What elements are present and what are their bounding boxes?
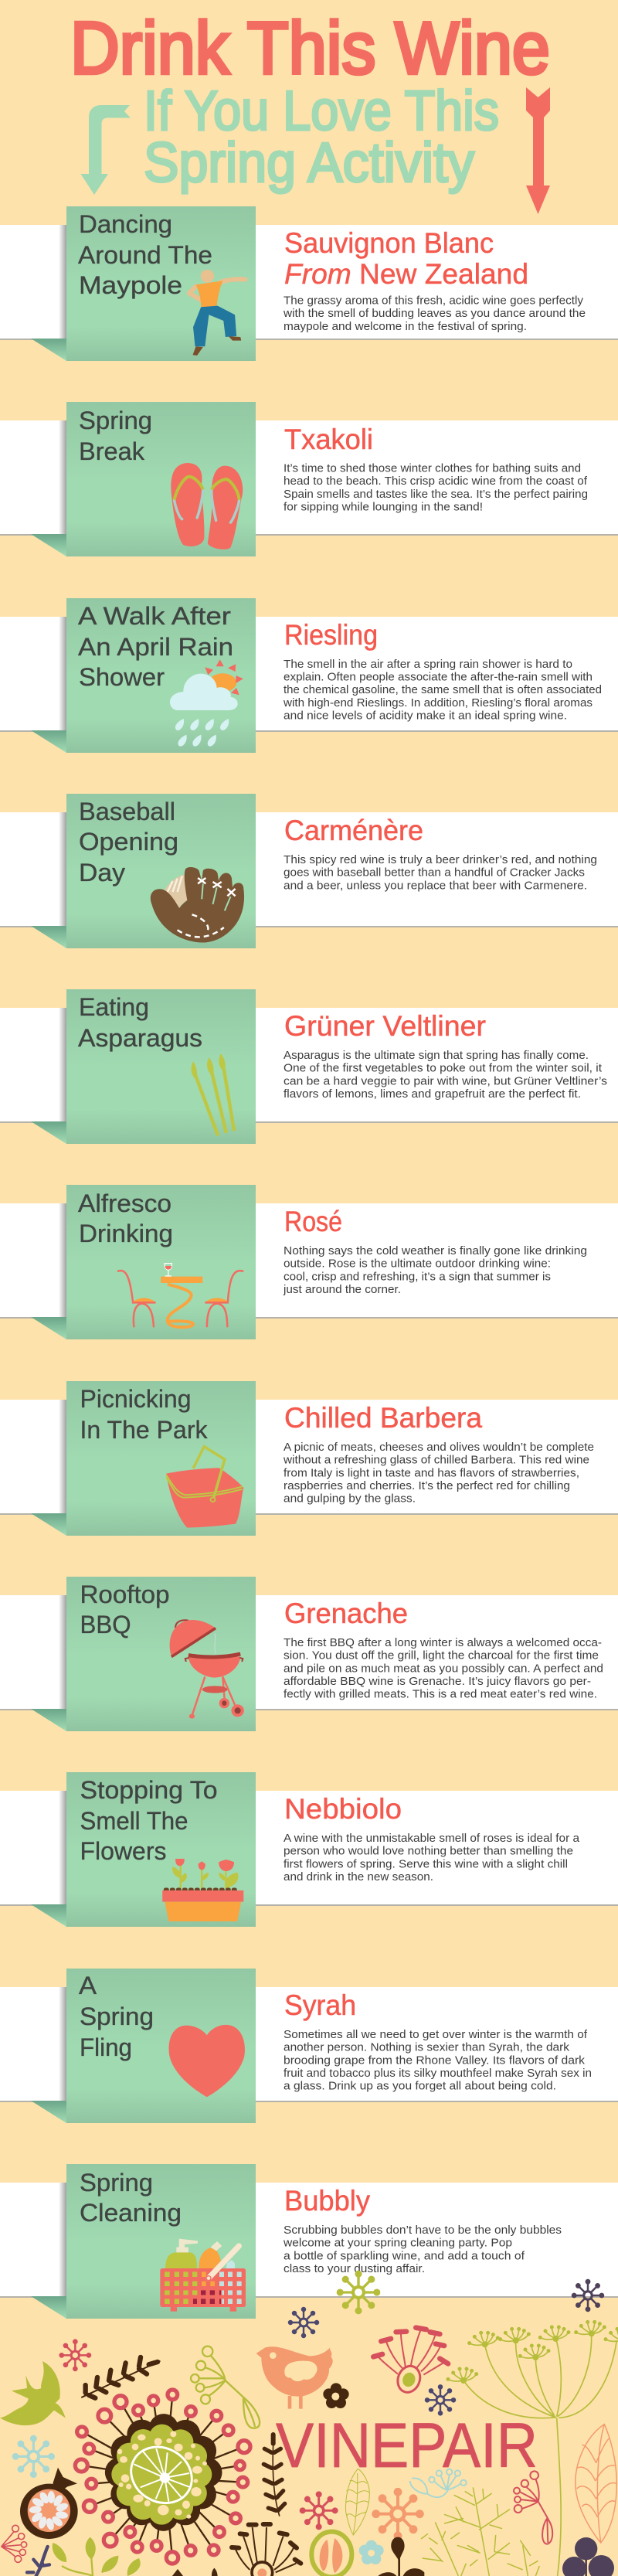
- activity title: Baseball: [79, 798, 175, 825]
- activity title: Eating: [79, 993, 149, 1021]
- description: fectly with grilled meats. This is a red meat eater’s red wine.: [284, 1688, 597, 1700]
- activity title: [80, 1581, 170, 1638]
- description: The first BBQ after a long winter is always a welcomed occa-: [284, 1636, 602, 1649]
- icon: dill umbels: [448, 2322, 618, 2576]
- activity title: Flowers: [80, 1837, 167, 1865]
- icon: heart: [169, 2025, 245, 2097]
- row: Dancing Around The Maypole: [0, 206, 618, 361]
- white band: [0, 420, 618, 536]
- activity title: Cleaning: [80, 2199, 182, 2227]
- description: [284, 853, 597, 892]
- white band: [0, 1203, 618, 1319]
- activity title: Around The: [78, 241, 212, 269]
- activity title: [79, 1972, 154, 2061]
- activity title: [80, 1385, 209, 1444]
- description: This spicy red wine is truly a beer drinker’s red, and nothing: [284, 853, 597, 866]
- activity title: Spring: [80, 2169, 153, 2197]
- wine name: Riesling: [284, 619, 378, 651]
- wine name: Sauvignon Blanc: [284, 227, 494, 259]
- logo: VINEPAIR: [276, 2411, 538, 2481]
- wine name: Syrah: [284, 1989, 356, 2021]
- description: [284, 1636, 603, 1700]
- description: A picnic of meats, cheeses and olives wouldn’t be complete: [284, 1441, 594, 1454]
- folded corner: [31, 534, 66, 556]
- description: One of the first vegetables to poke out from the winter soil, it: [284, 1062, 603, 1074]
- activity title: Opening: [79, 828, 178, 856]
- icon: dark branch: [82, 2357, 160, 2398]
- description: [284, 462, 588, 513]
- icon: red fan flower: [373, 2328, 448, 2395]
- icon: olive branches: [421, 2487, 539, 2576]
- icon: baseball glove: [151, 867, 244, 943]
- icon: brown spade plant: [378, 2537, 424, 2576]
- activity title: Fling: [80, 2033, 132, 2061]
- activity title: Day: [79, 859, 125, 886]
- wine name: Txakoli: [284, 424, 373, 455]
- icon: bottom seeds: [172, 2568, 218, 2576]
- description: [284, 1049, 607, 1101]
- description: [283, 294, 586, 333]
- activity title: Smell The: [80, 1807, 188, 1835]
- title: Drink This Wine: [70, 7, 550, 90]
- description: [283, 1441, 594, 1506]
- description: a glass. Drink up as you forget all about being cold.: [284, 2079, 556, 2093]
- icon: navy spark: [427, 2387, 453, 2413]
- description: and gulping by the glass.: [284, 1492, 416, 1506]
- icon: brown sprig: [263, 2435, 285, 2516]
- activity title: Rooftop: [80, 1581, 170, 1608]
- description: another person. Nothing is sexier than Syrah, the dark: [284, 2040, 570, 2054]
- icon: olive leaves: [53, 2537, 141, 2576]
- wine name: Nebbiolo: [284, 1793, 402, 1825]
- green card: [66, 1772, 256, 1927]
- icon: red spark: [303, 2494, 335, 2527]
- icon: cafe table and chairs: [117, 1264, 243, 1327]
- description: for sipping while lounging in the sand!: [284, 501, 483, 513]
- row: Baseball Opening Day: [0, 794, 618, 948]
- description: sion. You dust off the grill, light the charcoal for the first time: [284, 1649, 599, 1662]
- activity title: [78, 1189, 173, 1247]
- white band: [0, 617, 618, 732]
- description: Scrubbing bubbles don’t have to be the only bubbles: [284, 2224, 562, 2237]
- activity title: Stopping To: [80, 1776, 218, 1804]
- icon: olive swallow: [0, 2361, 66, 2425]
- description: Sometimes all we need to get over winter is the warmth of: [284, 2028, 588, 2041]
- green card: [66, 1577, 256, 1731]
- description: head to the beach. This crisp acidic wine from the coast of: [284, 475, 588, 488]
- icon: blue spark: [15, 2438, 52, 2475]
- icon: picnic basket: [166, 1447, 243, 1528]
- activity title: Spring: [80, 2003, 154, 2030]
- icon: orange bird: [256, 2346, 333, 2409]
- folded corner: [31, 2101, 66, 2123]
- folded corner: [31, 730, 66, 753]
- icon: brown flower: [323, 2383, 349, 2408]
- green card: [66, 989, 256, 1144]
- icon: olive leaf outline: [346, 2469, 369, 2535]
- description: [283, 658, 602, 722]
- description: raspberries and cherries. It’s the perfect red for chilling: [284, 1479, 570, 1492]
- icon: sun, cloud and rain: [170, 659, 243, 747]
- description: just around the corner.: [283, 1283, 401, 1296]
- description: Nothing says the cold weather is finally gone like drinking: [284, 1244, 587, 1257]
- description: It’s time to shed those winter clothes for bathing suits and: [284, 462, 581, 475]
- wine name: Grüner Veltliner: [284, 1010, 486, 1042]
- description: [283, 2224, 562, 2275]
- description: a bottle of sparkling wine, and add a touch of: [284, 2249, 525, 2263]
- folded corner: [31, 339, 66, 361]
- description: affordable BBQ wine is Grenache. It’s juicy flavors go per-: [284, 1675, 591, 1688]
- activity title: [78, 993, 202, 1052]
- footer right floral group: [303, 2322, 618, 2576]
- description: person who would love nothing better than smelling the: [284, 1844, 573, 1858]
- folded corner: [31, 926, 66, 948]
- footer left floral group: [0, 2342, 333, 2576]
- green card: [66, 1381, 256, 1536]
- white band: [0, 1008, 618, 1123]
- description: and pile on as much meat as you possibly can. A perfect and: [284, 1662, 603, 1676]
- row: Stopping To Smell The Flowers: [0, 1772, 618, 1927]
- arrow: coral down arrow: [526, 87, 550, 214]
- description: Spain smells and tastes like the sea. It’s the perfect pairing: [284, 488, 588, 501]
- green card: [66, 1969, 256, 2123]
- description: without a refreshing glass of chilled Barbera. This red wine: [283, 1453, 589, 1467]
- icon: orange big leaf: [576, 2425, 616, 2543]
- description: with high-end Rieslings. In addition, Riesling’s floral aromas: [283, 696, 593, 710]
- description: class to your dusting affair.: [284, 2262, 425, 2275]
- wine name: Rosé: [284, 1206, 342, 1237]
- activity title: [80, 2169, 182, 2227]
- activity title: Break: [79, 437, 145, 465]
- icon: kettle grill: [170, 1620, 244, 1719]
- activity title: Shower: [79, 663, 165, 691]
- green card: [66, 598, 256, 753]
- green card: [66, 2164, 256, 2319]
- wine name: [284, 227, 528, 290]
- description: [284, 2028, 592, 2093]
- icon: cyan sprig: [410, 2469, 467, 2497]
- icon: orange spark: [376, 2492, 419, 2536]
- folded corner: [31, 2296, 66, 2319]
- activity title: In The Park: [80, 1416, 209, 1444]
- description: fruit and tobacco plus its silky mouthfeel make Syrah sex in: [284, 2067, 592, 2080]
- description: [284, 1832, 580, 1884]
- row: Eating Asparagus: [0, 989, 618, 1144]
- description: from Italy is light in taste and has flavors of strawberries,: [284, 1467, 579, 1479]
- row: Alfresco Drinking: [0, 1185, 618, 1339]
- description: with the smell of budding leaves as you dance around the: [283, 307, 586, 320]
- folded corner: [31, 1904, 66, 1927]
- row: Rooftop BBQ: [0, 1577, 618, 1731]
- activity title: [79, 407, 152, 465]
- activity title: Asparagus: [78, 1024, 202, 1052]
- activity title: Spring: [79, 407, 152, 434]
- white band: [0, 812, 618, 927]
- icon: flower pot: [162, 1859, 243, 1921]
- activity title: A: [79, 1972, 97, 1999]
- activity title: Alfresco: [78, 1189, 171, 1217]
- green card: [66, 794, 256, 948]
- icon: blue flower: [359, 2540, 384, 2564]
- icon: small red sprig: [2, 2525, 27, 2562]
- description: maypole and welcome in the festival of spring.: [284, 320, 527, 333]
- folded corner: [31, 1513, 66, 1536]
- subtitle: [144, 80, 499, 194]
- activity title: An April Rain: [78, 633, 233, 661]
- activity title: [78, 210, 212, 299]
- icon: brown umbel: [232, 2524, 301, 2576]
- white band: [0, 1400, 618, 1515]
- description: and drink in the new season.: [284, 1870, 433, 1884]
- description: A wine with the unmistakable smell of roses is ideal for a: [284, 1832, 580, 1845]
- row: A Spring Fling: [0, 1969, 618, 2123]
- row: A Walk After An April Rain Shower: [0, 598, 618, 753]
- activity title: [79, 798, 178, 886]
- description: [283, 1244, 587, 1296]
- wine name: Carménère: [284, 815, 423, 846]
- subtitle: Spring Activity: [144, 132, 474, 194]
- wine name: Grenache: [284, 1598, 408, 1629]
- white band: [0, 2183, 618, 2298]
- folded corner: [31, 1317, 66, 1339]
- icon: navy sprig: [27, 2547, 49, 2576]
- row: Picnicking In The Park: [0, 1381, 618, 1536]
- description: brooding grape from the Rhone Valley. Its flavors of dark: [284, 2054, 586, 2067]
- description: can be a hard veggie to pair with wine, but Grüner Veltliner’s: [284, 1074, 607, 1088]
- icon: red spark: [62, 2342, 89, 2369]
- icon: cleaning caddy: [160, 2239, 246, 2312]
- icon: big flower: [75, 2390, 250, 2564]
- description: first flowers of spring. Serve this wine with a slight chill: [284, 1858, 568, 1870]
- activity title: Drinking: [79, 1220, 173, 1247]
- row: Spring Break: [0, 402, 618, 556]
- icon: top sparks: [290, 2274, 602, 2336]
- description: flavors of lemons, limes and grapefruit are the perfect fit.: [284, 1087, 581, 1101]
- icon: oval seed: [311, 2532, 351, 2576]
- wine name: Bubbly: [284, 2185, 370, 2217]
- subtitle: If You Love This: [144, 80, 499, 142]
- green card: [66, 402, 256, 556]
- wine name: Chilled Barbera: [284, 1402, 482, 1434]
- description: Asparagus is the ultimate sign that spring has finally come.: [284, 1049, 589, 1062]
- icon: plum clover: [562, 2537, 614, 2576]
- green card: [66, 1185, 256, 1339]
- folded corner: [31, 1121, 66, 1144]
- description: The smell in the air after a spring rain shower is hard to: [284, 658, 572, 671]
- green card: [66, 206, 256, 361]
- icon: asparagus: [192, 1053, 234, 1135]
- icon: pomegranate: [20, 2468, 78, 2539]
- activity title: [78, 602, 233, 691]
- description: cool, crisp and refreshing, it’s a sign that summer is: [284, 1271, 551, 1283]
- arrow: green bent down arrow: [80, 105, 131, 195]
- icon: flip flops: [171, 463, 243, 550]
- activity title: [80, 1776, 218, 1865]
- row: Spring Cleaning: [0, 2164, 618, 2319]
- description: the chemical gasoline, the same smell that is often associated: [284, 683, 602, 696]
- description: outside. Rose is the ultimate outdoor drinking wine:: [284, 1257, 551, 1271]
- activity title: Dancing: [79, 210, 172, 238]
- description: The grassy aroma of this fresh, acidic wine goes perfectly: [284, 294, 583, 308]
- white band: [0, 1791, 618, 1906]
- description: and nice levels of acidity make it an ideal spring wine.: [284, 710, 567, 722]
- folded corner: [31, 1709, 66, 1731]
- icon: dancer: [189, 270, 245, 356]
- white band: [0, 225, 618, 340]
- icon: red whisk sprig: [514, 2471, 552, 2544]
- footer illustration: [0, 2274, 618, 2576]
- activity title: BBQ: [80, 1611, 131, 1638]
- activity title: A Walk After: [78, 602, 231, 630]
- icon: olive whisk sprig: [191, 2346, 260, 2428]
- description: and a beer, unless you replace that beer with Carmenere.: [284, 880, 587, 892]
- activity title: Picnicking: [80, 1385, 192, 1413]
- description: welcome at your spring cleaning party. Pop: [283, 2237, 512, 2249]
- description: explain. Often people associate the after-the-rain smell with: [284, 671, 593, 683]
- wine name: From New Zealand: [284, 258, 528, 290]
- description: goes with baseball better than a handful of Cracker Jacks: [284, 866, 585, 880]
- white band: [0, 1987, 618, 2102]
- activity title: Maypole: [79, 271, 182, 299]
- white band: [0, 1595, 618, 1710]
